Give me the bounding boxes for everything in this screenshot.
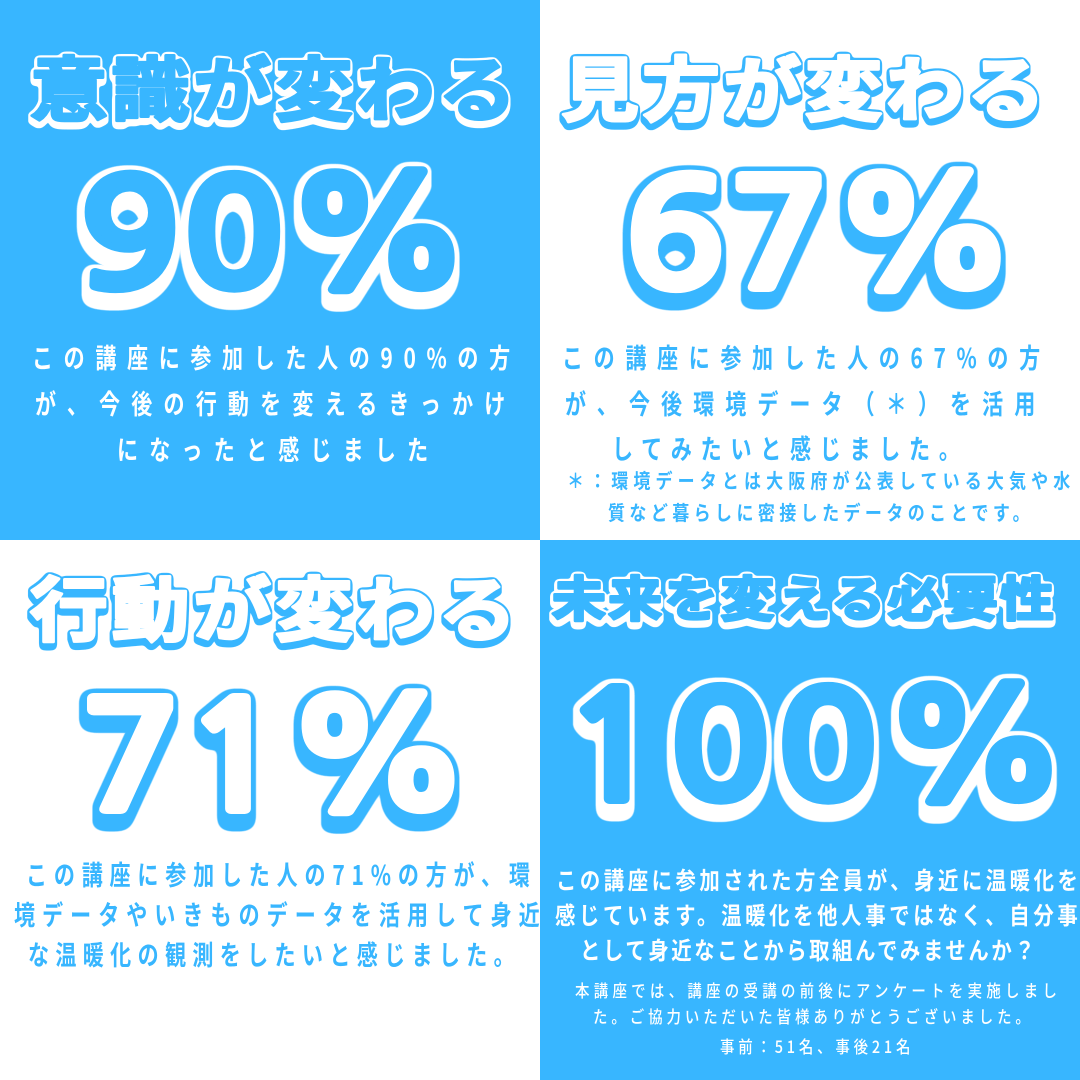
- description: 71%: 境データやいきものデータを活用して身近: [14, 894, 540, 933]
- big number: 100%: 100%: [562, 674, 1067, 823]
- description: 100%: 感じています。温暖化を他人事ではなく、自分事: [555, 897, 1078, 932]
- description: 90%: になったと感じました: [117, 429, 428, 468]
- survey note: 本講座では、講座の受講の前後にアンケートを実施しまし: [575, 978, 1057, 1002]
- description: 100%: として身近なことから取組んでみませんか？: [580, 932, 1035, 967]
- description: 71%: な温暖化の観測をしたいと感じました。: [28, 934, 515, 973]
- description: 71%: この講座に参加した人の71%の方が、環: [26, 854, 530, 893]
- description: 67%: してみたいと感じました。: [612, 428, 960, 467]
- survey note: た。ご協力いただいた皆様ありがとうございました。: [593, 1004, 1030, 1028]
- panel: viewpoint changes: [540, 0, 1080, 540]
- description: 71%: [14, 854, 540, 973]
- description: 67%: [562, 337, 1040, 467]
- description: 100%: [555, 862, 1078, 967]
- description: 90%: この講座に参加した人の90%の方: [32, 337, 510, 376]
- heading: future: 未来を変える必要性: [552, 560, 1054, 630]
- big number: 67%: 67%: [624, 162, 1016, 311]
- footnote: environmental data: ＊：環境データとは大阪府が公表している大気や水: [567, 465, 1071, 494]
- heading: viewpoint: 見方が変わる: [561, 35, 1045, 136]
- footnote: environmental data: [567, 465, 1071, 526]
- survey note: [575, 978, 1057, 1058]
- description: 67%: この講座に参加した人の67%の方: [562, 337, 1040, 376]
- survey note: 事前：51名、事後21名: [720, 1034, 910, 1058]
- panel: need to change the future: [540, 540, 1080, 1080]
- description: 100%: この講座に参加された方全員が、身近に温暖化を: [556, 862, 1078, 897]
- heading: awareness: 意識が変わる: [30, 35, 516, 136]
- panel: action changes: [0, 540, 540, 1080]
- description: 90%: [32, 337, 510, 468]
- heading: action: 行動が変わる: [30, 555, 516, 656]
- footnote: environmental data: 質など暮らしに密接したデータのことです。: [608, 497, 1030, 526]
- panel: awareness changes: [0, 0, 540, 540]
- description: 90%: が、今後の行動を変えるきっかけ: [35, 383, 505, 422]
- big number: 90%: 90%: [79, 162, 470, 311]
- description: 67%: が、今後環境データ（＊）を活用: [565, 383, 1035, 422]
- big number: 71%: 71%: [80, 684, 470, 833]
